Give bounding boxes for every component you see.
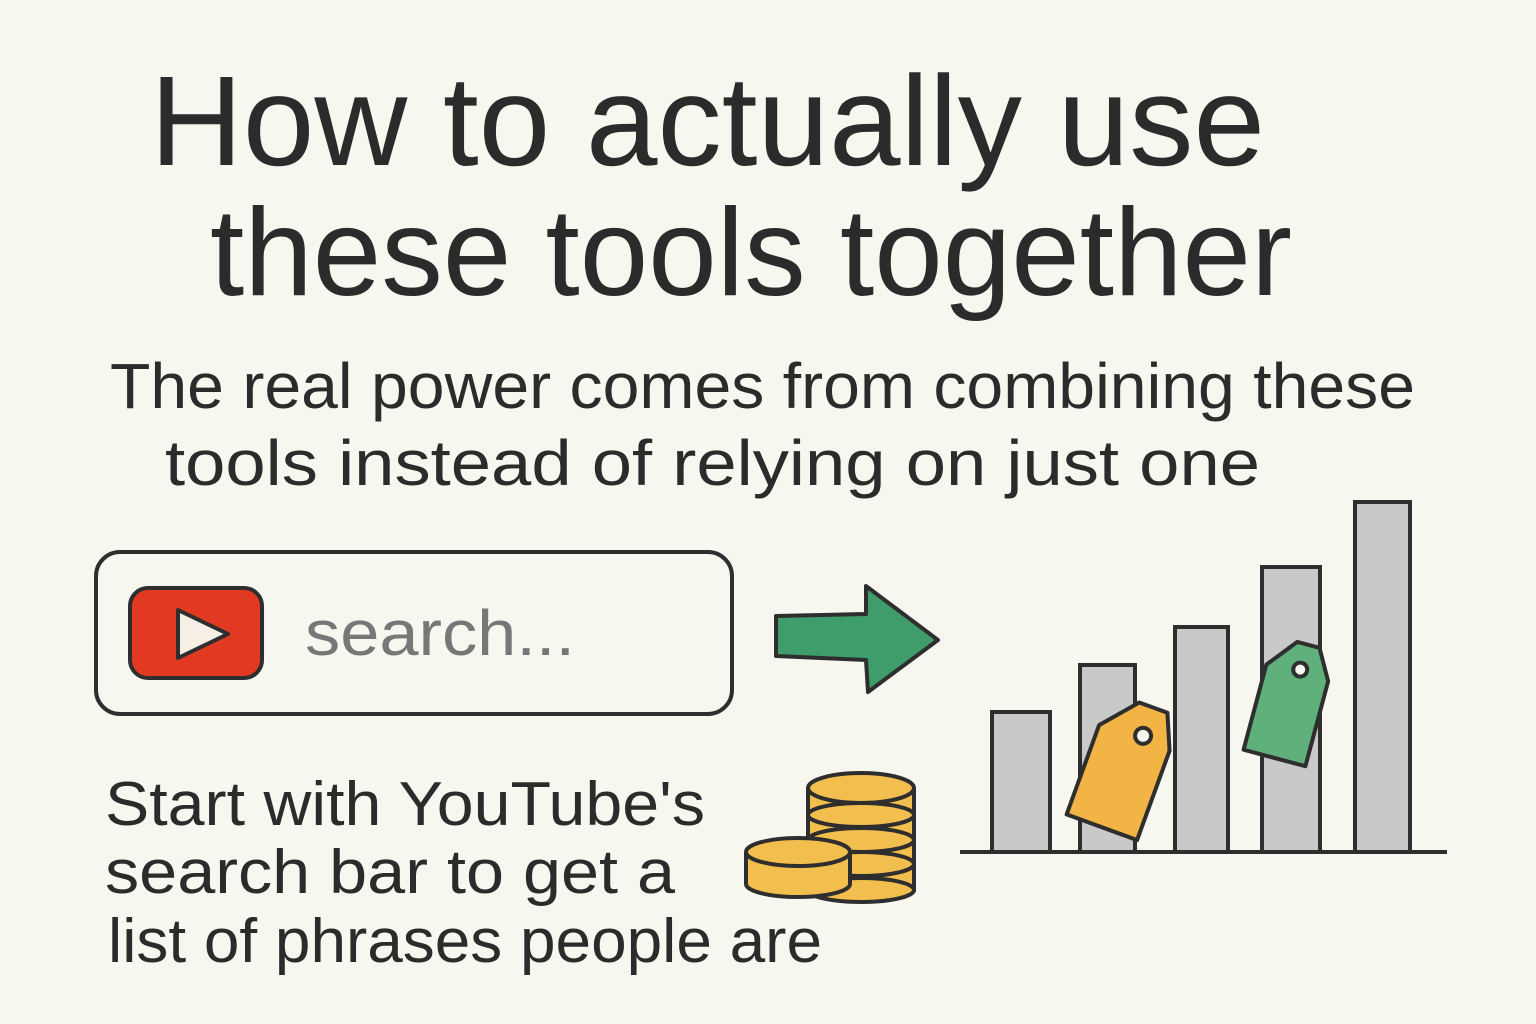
- subtitle: The real power comes from combining these: [110, 350, 1415, 422]
- title: How to actually use: [150, 50, 1265, 193]
- bar chart: [960, 502, 1447, 852]
- subtitle: tools instead of relying on just one: [165, 427, 1260, 499]
- body text: Start with YouTube's: [105, 770, 705, 839]
- icon: green tag: [1244, 636, 1336, 766]
- icon: youtube: [130, 588, 262, 678]
- body text: list of phrases people are: [108, 907, 822, 976]
- body text: [105, 770, 822, 976]
- search bar: [96, 552, 732, 714]
- subtitle: [110, 350, 1415, 499]
- title: [150, 50, 1292, 322]
- arrow: [776, 586, 938, 692]
- title: these tools together: [210, 184, 1292, 322]
- search bar: search...: [305, 597, 575, 669]
- body text: search bar to get a: [105, 838, 676, 907]
- icon: coins: [746, 773, 914, 902]
- icon: orange tag: [1067, 692, 1182, 840]
